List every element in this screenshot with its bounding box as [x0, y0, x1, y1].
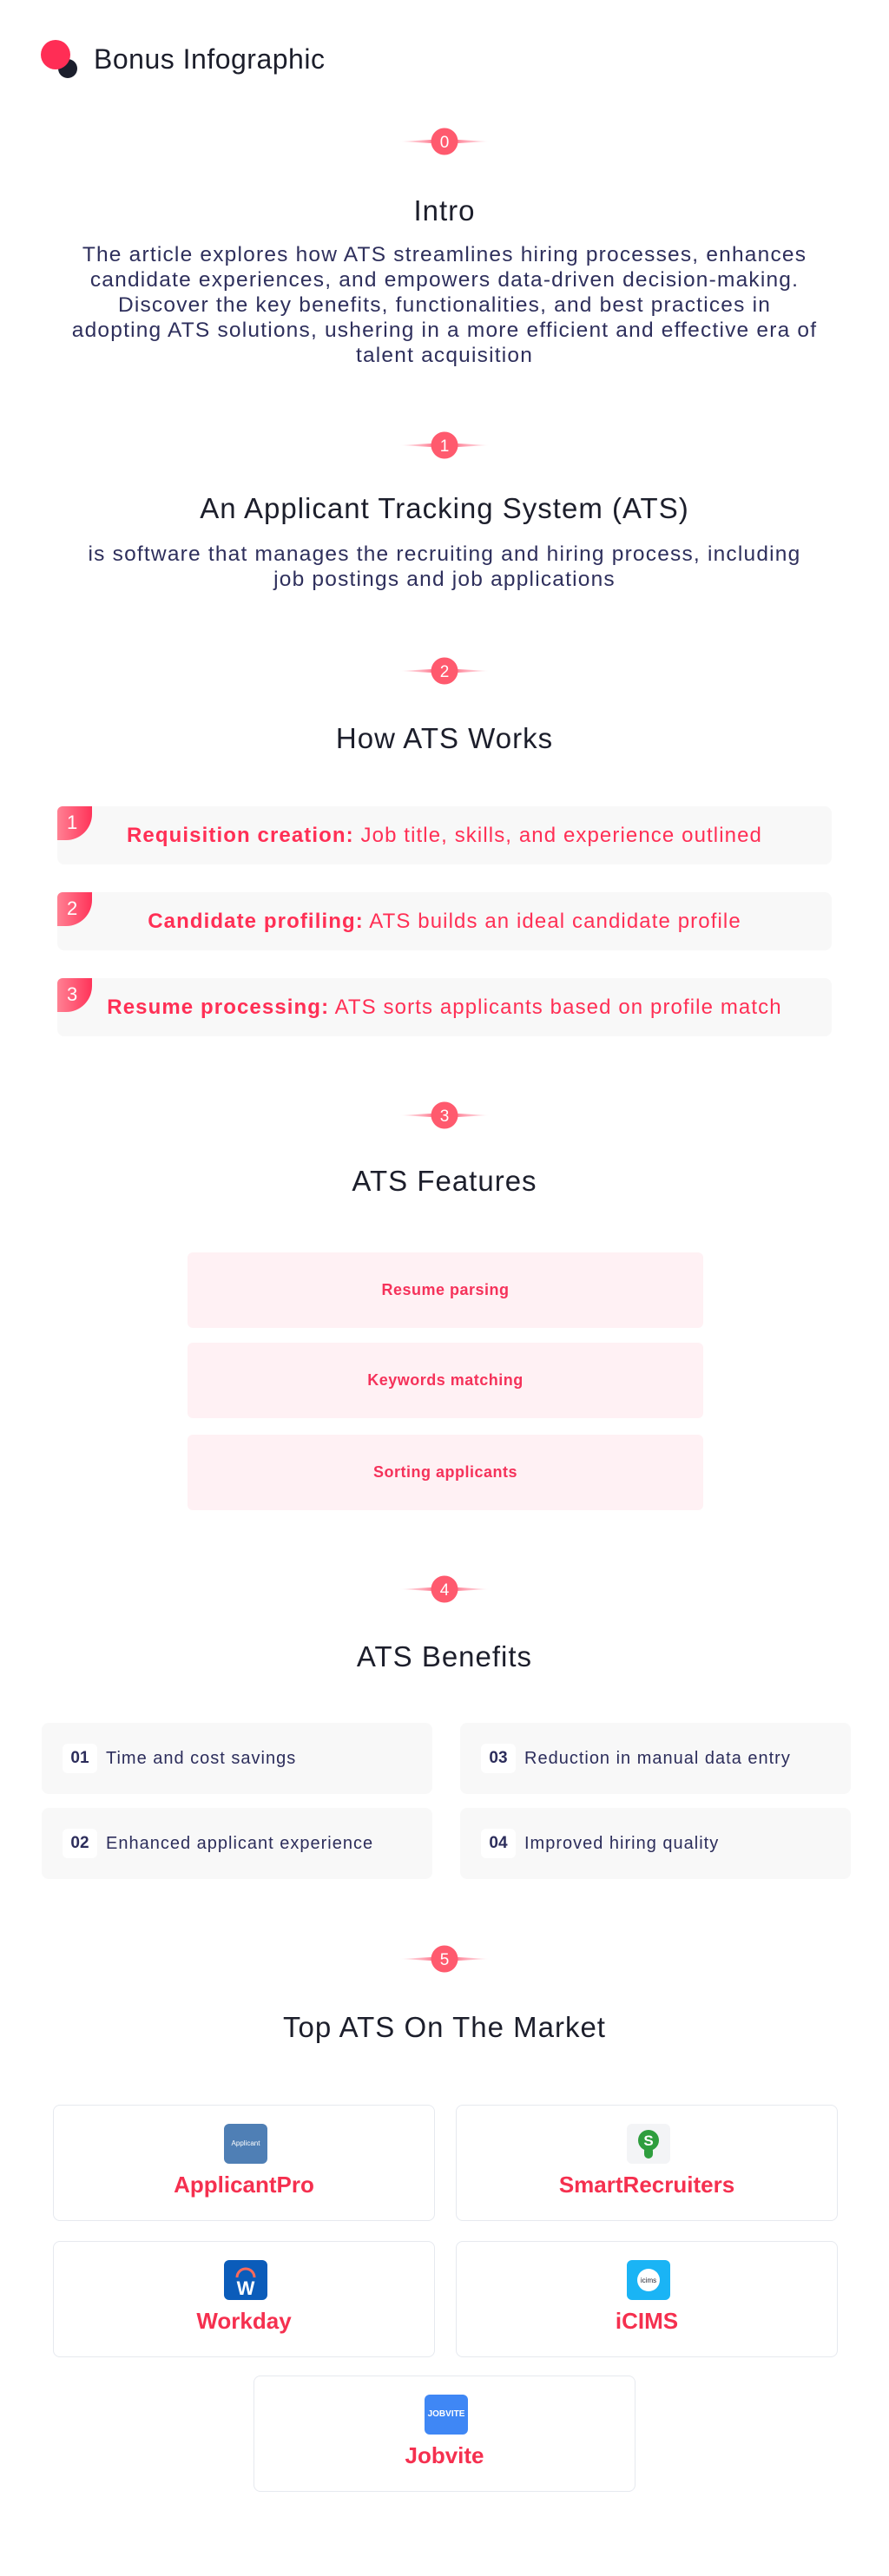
icon: Workday	[224, 2260, 267, 2300]
feature: keywords matching: Keywords matching	[367, 1371, 524, 1389]
intro text: talent acquisition	[356, 344, 533, 367]
icon: Jobvite: JOBVITE	[428, 2409, 464, 2419]
badge 1: 1	[440, 437, 449, 456]
icon: ApplicantPro: Applicant	[232, 2139, 260, 2147]
card: Jobvite: Jobvite	[405, 2442, 484, 2468]
heading: ATS definition: An Applicant Tracking System (ATS)	[200, 492, 689, 524]
benefit 01	[42, 1723, 432, 1794]
benefit 02	[42, 1808, 432, 1879]
badge 3	[404, 1102, 485, 1128]
icon: SmartRecruiters: S	[643, 2132, 654, 2149]
card: Jobvite	[254, 2376, 635, 2492]
badge 2	[404, 658, 485, 684]
feature: resume parsing: Resume parsing	[381, 1281, 510, 1298]
badge 5: 5	[440, 1951, 449, 1969]
benefit 01: Time and cost savings	[106, 1749, 296, 1768]
benefit 04: Improved hiring quality	[524, 1834, 719, 1853]
badge 1	[404, 432, 485, 458]
card: Workday: Workday	[196, 2308, 292, 2334]
feature: keywords matching	[188, 1343, 703, 1418]
benefit 03	[460, 1723, 851, 1794]
icon: Jobvite	[425, 2395, 468, 2435]
heading: How ATS Works: How ATS Works	[336, 722, 553, 754]
feature: sorting applicants	[188, 1435, 703, 1510]
step 3	[57, 978, 832, 1036]
benefit 01: 01	[70, 1749, 89, 1767]
step 1: Requisition creation: Job title, skills, and experience outlined	[127, 824, 762, 847]
heading: ATS Benefits: ATS Benefits	[357, 1640, 532, 1672]
heading: Intro: Intro	[413, 194, 476, 227]
card: iCIMS: iCIMS	[616, 2308, 678, 2334]
header	[41, 40, 325, 78]
icon: SmartRecruiters	[627, 2124, 670, 2164]
benefit 04: 04	[489, 1834, 508, 1852]
heading: ATS Features: ATS Features	[352, 1165, 537, 1197]
intro text: The article explores how ATS streamlines hiring processes, enhances	[82, 243, 807, 266]
badge 0: 0	[440, 134, 449, 152]
icon: ApplicantPro	[224, 2124, 267, 2164]
intro text: adopting ATS solutions, ushering in a more efficient and effective era of	[72, 319, 817, 342]
badge 3: 3	[440, 1107, 449, 1126]
intro text	[72, 243, 817, 367]
benefit 02: Enhanced applicant experience	[106, 1834, 373, 1853]
card: ApplicantPro: ApplicantPro	[174, 2172, 314, 2198]
icon: iCIMS: icims	[641, 2277, 656, 2284]
benefit 02: 02	[70, 1834, 89, 1852]
icon: logo dots	[41, 40, 77, 78]
card: iCIMS	[456, 2241, 838, 2357]
step 1: 1	[67, 812, 77, 833]
definition text: is software that manages the recruiting and hiring process, including	[89, 542, 800, 566]
intro text: Discover the key benefits, functionalities, and best practices in	[118, 293, 771, 317]
definition text: job postings and job applications	[273, 568, 616, 591]
benefit 03: Reduction in manual data entry	[524, 1749, 791, 1768]
step 2	[57, 892, 832, 950]
badge 0	[404, 128, 485, 154]
definition text	[89, 542, 800, 591]
intro text: candidate experiences, and empowers data-driven decision-making.	[90, 268, 799, 292]
step 1	[57, 806, 832, 864]
feature: sorting applicants: Sorting applicants	[373, 1463, 517, 1481]
benefit 03: 03	[489, 1749, 508, 1767]
badge 4: 4	[440, 1581, 450, 1600]
step 2: 2	[67, 897, 77, 919]
header title: Bonus Infographic	[94, 43, 325, 75]
step 3: Resume processing: ATS sorts applicants based on profile match	[107, 996, 782, 1019]
badge 5	[404, 1946, 485, 1972]
badge 2: 2	[440, 663, 449, 681]
step 3: 3	[67, 983, 77, 1005]
icon: Workday: W	[237, 2277, 255, 2299]
benefit 04	[460, 1808, 851, 1879]
feature: resume parsing	[188, 1252, 703, 1328]
heading: Top ATS: Top ATS On The Market	[283, 2011, 606, 2043]
card: ApplicantPro	[53, 2105, 435, 2221]
card: SmartRecruiters: SmartRecruiters	[559, 2172, 734, 2198]
step 2: Candidate profiling: ATS builds an ideal candidate profile	[148, 910, 741, 933]
card: Workday	[53, 2241, 435, 2357]
icon: iCIMS	[627, 2260, 670, 2300]
badge 4	[404, 1576, 485, 1602]
card: SmartRecruiters	[456, 2105, 838, 2221]
